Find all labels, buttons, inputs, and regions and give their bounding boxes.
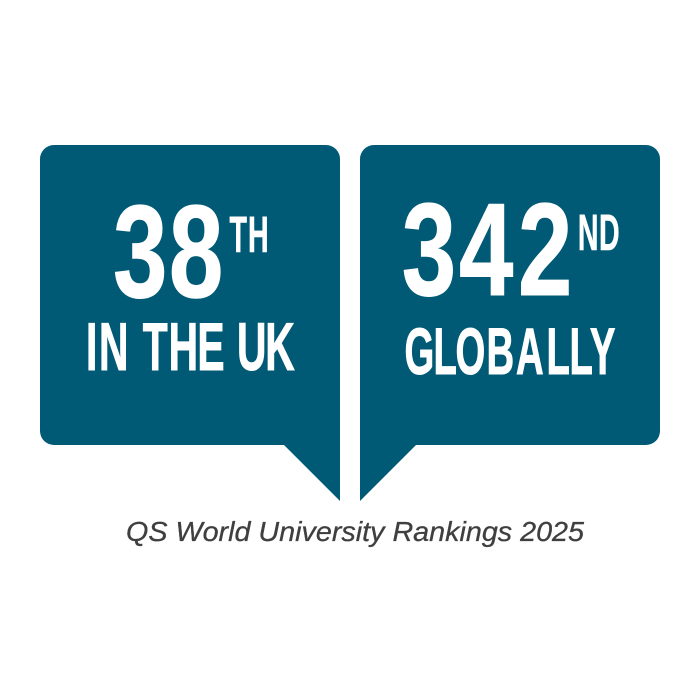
label: globally: GLOBALLY [404, 315, 615, 389]
ordinal suffix: ND: ND [578, 204, 620, 261]
panel: global ranking speech bubble [360, 145, 660, 501]
bubble shape: right [360, 145, 660, 501]
panel: UK ranking speech bubble [0, 145, 340, 501]
rank number: 342: 342 [402, 176, 572, 323]
label: in the UK: IN THE UK [0, 308, 295, 385]
rank number: 38: 38 [113, 178, 223, 325]
caption: QS World University Rankings 2025 [126, 516, 584, 547]
ordinal suffix: TH: TH [229, 206, 269, 263]
bubble shape: left [40, 145, 340, 501]
